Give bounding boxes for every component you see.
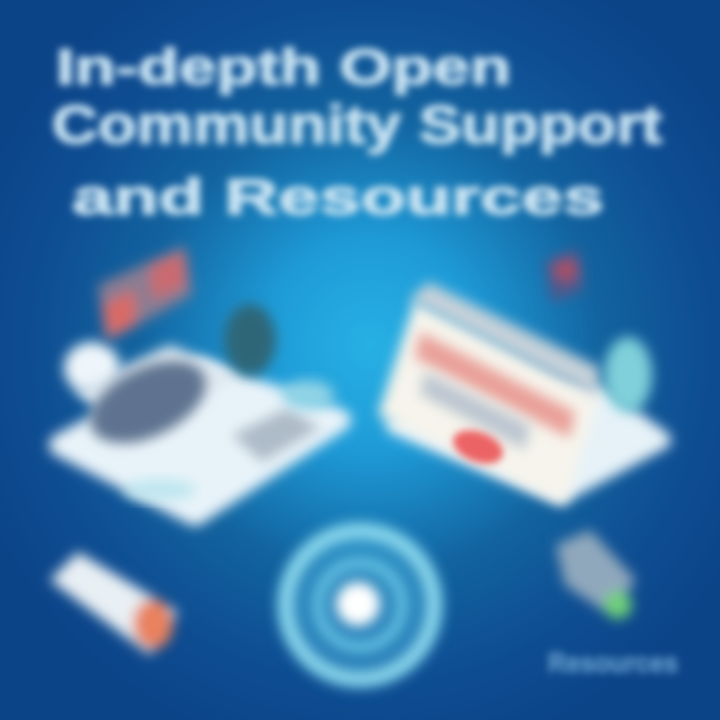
- grey text lines: [420, 372, 530, 450]
- left isometric platform: [60, 342, 340, 515]
- small keypad: [232, 408, 320, 462]
- red heading band: [415, 332, 575, 438]
- round button left: [64, 342, 120, 394]
- open document page: [378, 300, 600, 505]
- title: and Resources: [72, 169, 604, 225]
- icon: red and dark flag: [545, 248, 584, 302]
- document grey top bar: [410, 282, 600, 398]
- teal cylinder: [604, 337, 652, 413]
- center dot: [336, 582, 380, 626]
- icon: red and slate card: [98, 246, 192, 342]
- platform base: [60, 370, 340, 515]
- caption bottom right: Resources: [548, 647, 678, 678]
- title: In-depth Open: [56, 39, 511, 95]
- panel behind keyboard: [75, 345, 240, 445]
- platform base: [395, 395, 662, 495]
- icon: concentric circle target: [282, 527, 438, 683]
- glow disc: [282, 527, 438, 683]
- icon: dark green device: [224, 304, 276, 376]
- icon: pill device bottom left: [50, 552, 178, 655]
- red button: [448, 424, 508, 470]
- lower teal strip: [124, 479, 196, 501]
- dark oval device: [77, 344, 219, 460]
- outer ring: [286, 531, 434, 679]
- title: Community Support: [52, 95, 662, 155]
- teal accent: [282, 380, 334, 410]
- title: [52, 39, 662, 225]
- right isometric platform: [378, 282, 662, 505]
- icon: grey tablet with green dot: [556, 530, 636, 619]
- inner ring: [318, 563, 402, 647]
